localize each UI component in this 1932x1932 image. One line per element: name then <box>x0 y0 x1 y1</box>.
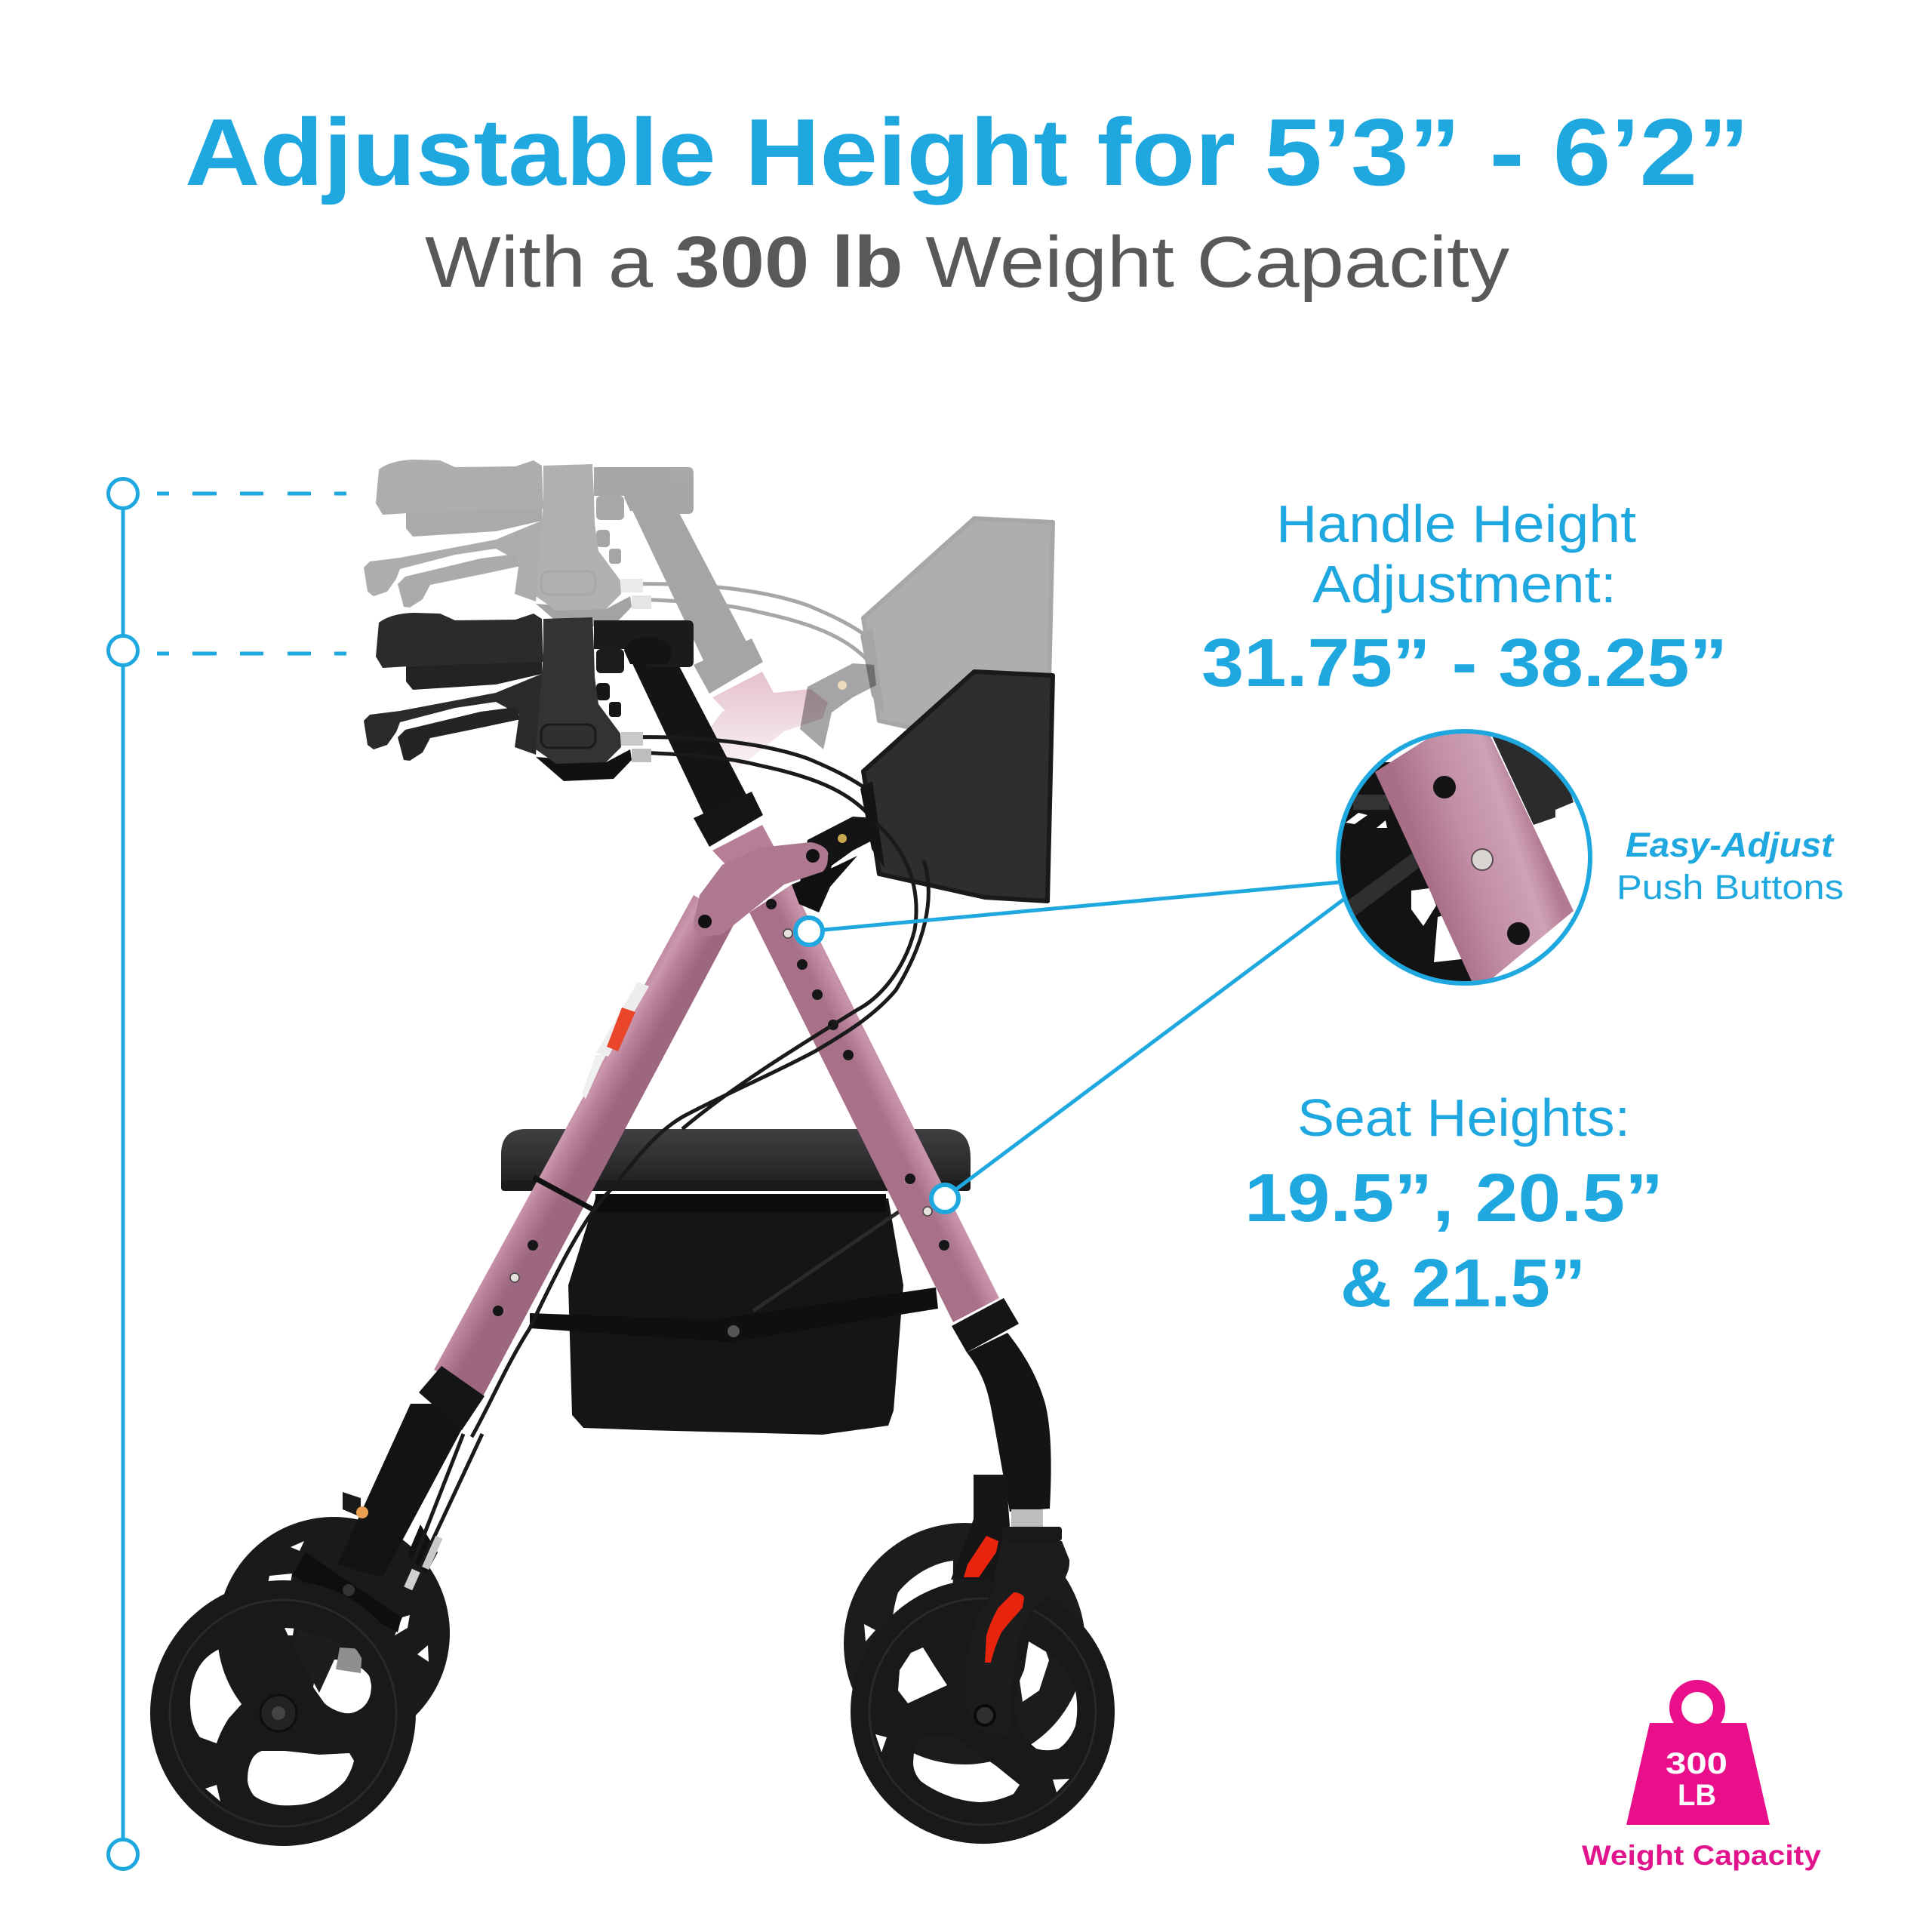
walker frame <box>292 817 1051 1693</box>
backrest arm <box>800 817 876 903</box>
handle height text <box>1201 494 1727 701</box>
right tube <box>749 884 999 1322</box>
push buttons label: Push Buttons <box>1617 868 1844 906</box>
lower collars <box>419 1366 485 1430</box>
upper stem <box>712 825 777 875</box>
frame holes <box>493 899 949 1316</box>
seat <box>501 1129 971 1185</box>
inset circle: push button close-up <box>1336 724 1592 989</box>
push buttons label <box>1617 826 1844 906</box>
callout lines and markers <box>795 882 1343 1212</box>
rear tube label <box>596 982 649 1057</box>
handle assembly <box>364 613 1053 901</box>
icon: 300 lb weight: LB <box>1678 1779 1716 1812</box>
hinge plate <box>694 842 829 937</box>
handle height text: 31.75” - 38.25” <box>1201 626 1727 701</box>
right rear wheel <box>844 1523 1085 1764</box>
front fork <box>966 1541 1069 1736</box>
ghost raised handle and backrest <box>364 460 1053 783</box>
icon: 300 lb weight: 300 <box>1666 1747 1727 1780</box>
left tube <box>434 895 736 1396</box>
lower cables <box>472 823 928 1437</box>
front left wheel <box>150 1580 416 1846</box>
subtitle: With a 300 lb Weight Capacity <box>425 222 1509 303</box>
push buttons label: Easy-Adjust <box>1626 826 1835 864</box>
bracket under hinge <box>792 856 857 912</box>
handle height text: Adjustment: <box>1312 555 1617 614</box>
push buttons <box>510 929 932 1282</box>
icon: 300 lb weight <box>1626 1686 1770 1825</box>
curved front leg <box>967 1333 1051 1512</box>
handle height text: Handle Height <box>1276 494 1636 553</box>
front right wheel <box>851 1580 1115 1844</box>
weight capacity label: Weight Capacity <box>1582 1840 1821 1871</box>
rear caster stem <box>951 1475 1010 1580</box>
seat heights text: Seat Heights: <box>1297 1088 1630 1147</box>
title: Adjustable Height for 5’3” - 6’2” <box>185 99 1749 205</box>
front wheels <box>150 1527 1115 1846</box>
height scale line <box>109 478 346 1869</box>
basket <box>568 1198 903 1435</box>
seat heights text: 19.5”, 20.5” <box>1244 1161 1663 1236</box>
cross bar <box>530 1287 938 1342</box>
zip tie <box>534 1177 598 1212</box>
rear wheels <box>217 1517 1085 1764</box>
left rear wheel <box>217 1517 450 1749</box>
seat heights text: & 21.5” <box>1340 1246 1586 1321</box>
seat heights text <box>1244 1088 1663 1321</box>
rear lower tube and brake <box>337 1404 475 1577</box>
